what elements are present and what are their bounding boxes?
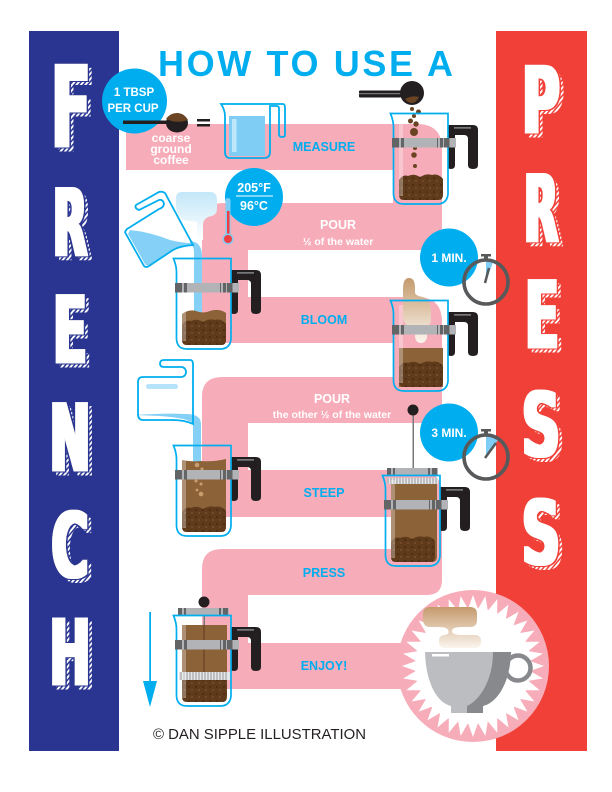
icon: stopwatch 3 minutes xyxy=(464,429,508,479)
step label: measure: MEASURE xyxy=(293,140,355,154)
heading: FRENCH: F xyxy=(52,43,90,175)
heading: PRESS: S xyxy=(522,483,560,586)
panel: FRENCH side banner xyxy=(29,31,119,751)
icon: pitcher pouring remaining water xyxy=(135,360,201,462)
heading: FRENCH: H xyxy=(50,601,90,708)
step label: pour half: POUR xyxy=(320,218,356,232)
heading: PRESS: E xyxy=(525,260,559,371)
heading: FRENCH: R xyxy=(53,170,87,279)
callout: water temperature xyxy=(225,168,283,226)
illustration: enjoy coffee cup in starburst xyxy=(397,590,549,742)
text: coarse ground coffee: coarse xyxy=(152,131,191,145)
callout: water temperature: 96°C xyxy=(240,199,268,213)
heading: PRESS: P xyxy=(522,46,560,155)
icon: measuring pitcher with water xyxy=(221,104,285,158)
starburst xyxy=(402,595,544,737)
glass: steep step xyxy=(174,446,261,536)
step label: pour half: ½ of the water xyxy=(303,236,373,248)
icon: thermometer xyxy=(222,198,234,244)
hatched shadow of FRENCH letters xyxy=(56,68,92,690)
step label: pour half xyxy=(303,218,373,248)
glass: plunger pressed down xyxy=(174,596,261,706)
icon: scoop pouring grounds xyxy=(359,81,424,168)
heading: FRENCH: C xyxy=(52,494,88,599)
icon: tilted pitcher pouring xyxy=(125,192,202,313)
step label: steep: STEEP xyxy=(304,486,344,500)
heading: PRESS: S xyxy=(522,375,560,478)
glass: first pour, bloom starting xyxy=(174,258,261,349)
icon: measuring scoop xyxy=(123,113,188,132)
glass: measure step with grounds xyxy=(390,114,478,204)
callout: 1 minute: 1 MIN. xyxy=(431,251,467,265)
credit line: © DAN SIPPLE ILLUSTRATION xyxy=(153,727,366,743)
text: coarse ground coffee xyxy=(150,131,192,167)
heading: FRENCH xyxy=(50,43,90,708)
glass: press with plunger raised xyxy=(382,404,470,566)
steam from hot water xyxy=(176,192,217,240)
serpentine pink path xyxy=(126,124,442,689)
callout: 1 minute xyxy=(420,228,478,286)
callout: 3 minutes xyxy=(420,404,478,462)
callout: 1 tbsp per cup xyxy=(102,68,167,134)
hatched shadow of PRESS letters xyxy=(528,74,564,570)
step label: pour other half: the other ½ of the water xyxy=(273,409,391,421)
callout: 1 tbsp per cup: 1 TBSP xyxy=(114,87,154,99)
callout: water temperature: 205°F xyxy=(237,181,271,195)
callout: 3 minutes: 3 MIN. xyxy=(431,426,467,440)
heading: PRESS xyxy=(522,46,560,586)
title: HOW TO USE A xyxy=(158,43,453,84)
glass: bloom step xyxy=(390,300,478,391)
icon: stopwatch 1 minute xyxy=(464,254,508,304)
step label: pour other half: POUR xyxy=(314,392,350,406)
text: coarse ground coffee: coffee xyxy=(153,153,189,167)
heading: FRENCH: E xyxy=(53,275,87,386)
step label: press: PRESS xyxy=(303,566,345,580)
arrow: press downward xyxy=(143,612,157,707)
heading: FRENCH: N xyxy=(50,384,90,494)
callout: 1 tbsp per cup: PER CUP xyxy=(107,103,159,115)
steam rising in bloom glass xyxy=(403,278,431,343)
text: coarse ground coffee: ground xyxy=(150,142,192,156)
coffee cup xyxy=(425,652,530,713)
step label: pour other half xyxy=(273,392,391,421)
step label: enjoy: ENJOY! xyxy=(301,659,347,673)
step label: bloom: BLOOM xyxy=(301,313,347,327)
panel: PRESS side banner xyxy=(496,31,587,751)
icon: equals sign xyxy=(197,119,210,126)
heading: PRESS: R xyxy=(524,156,558,265)
steam above cup xyxy=(423,607,481,648)
